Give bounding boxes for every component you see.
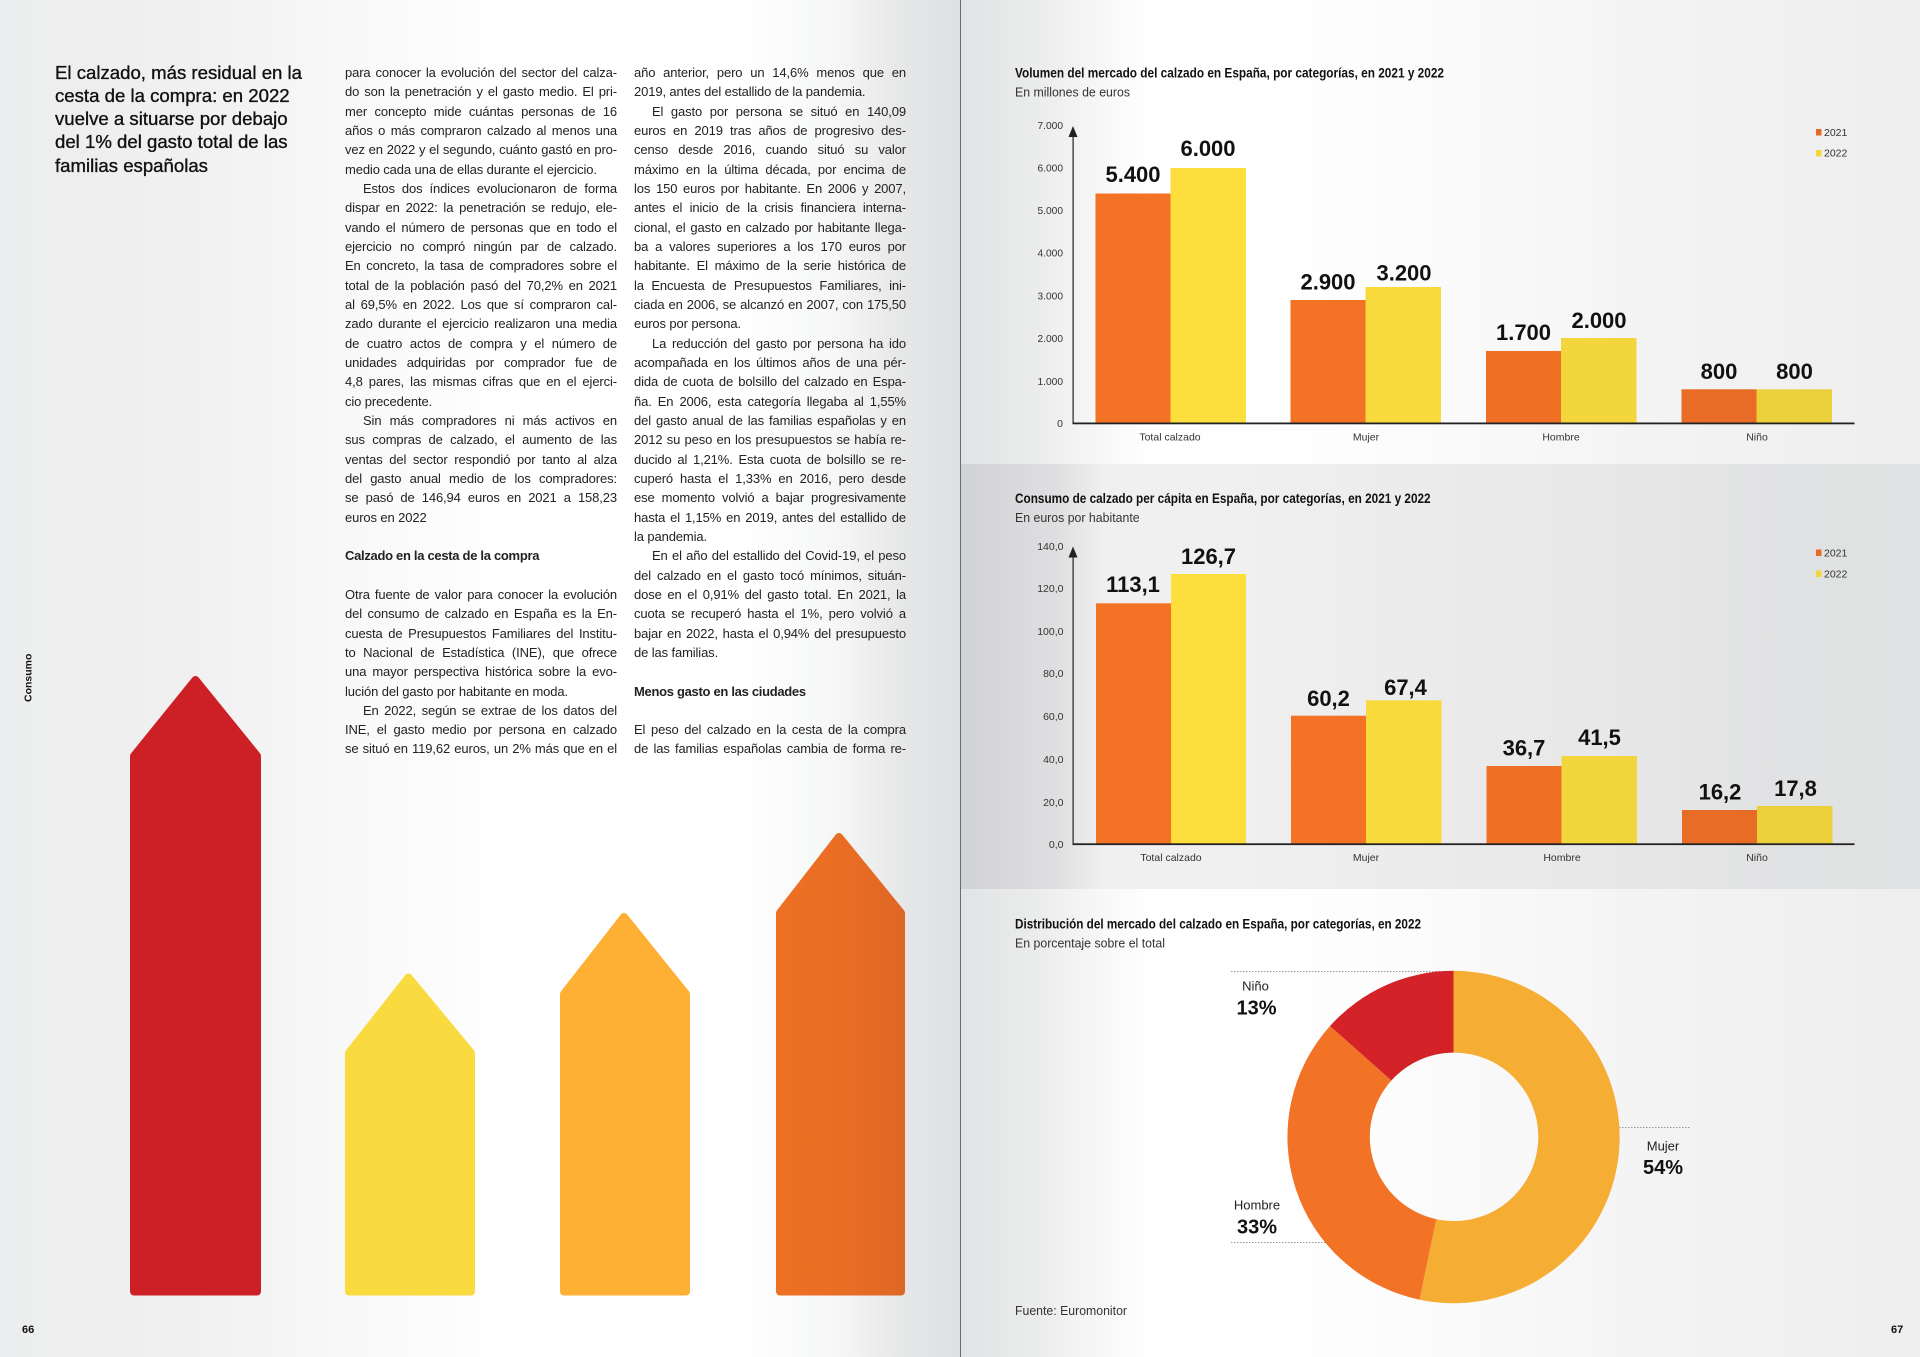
chart 2 value labels: 16,2: [1699, 780, 1741, 805]
text block: second column: [634, 65, 906, 756]
text block: second column: acompañada en los últimos años de una pér-: [634, 355, 906, 370]
text block: second column: del gasto anual de las familias españolas y en: [634, 413, 906, 428]
chart 1 legend: 2021: [1824, 127, 1848, 139]
arrow: amber: [564, 917, 686, 1292]
arrow: dark orange: [780, 837, 901, 1292]
chart 2 y axis labels: 80,0: [1043, 668, 1064, 680]
text block: first column: cio precedente.: [345, 394, 432, 409]
heading: left page title: El calzado, más residual en la: [55, 62, 302, 82]
chart 1 legend: 2022: [1824, 148, 1848, 160]
donut segment: Mujer: [1420, 971, 1620, 1303]
text block: first column: Estos dos índices evolucionaron de forma: [363, 181, 617, 196]
chart 2 y axis labels: 20,0: [1043, 797, 1064, 809]
text block: first column: En concreto, la tasa de compradores sobre el: [345, 258, 617, 273]
text block: second column: cional, el gasto en calzado por habitante llega-: [634, 220, 906, 235]
text block: first column: se pasó de 146,94 euros en 2021 a 158,23: [345, 490, 617, 505]
chart 1 axes: [1068, 126, 1854, 424]
chart 1 value labels: 800: [1776, 359, 1813, 384]
text block: first column: lución del gasto por habitante en moda.: [345, 684, 568, 698]
text block: second column: cuota se recuperó hasta el 1%, pero volvió a: [634, 606, 906, 621]
chart 2 legend: 2022: [1824, 568, 1848, 580]
donut segment: Hombre: [1287, 1026, 1436, 1300]
text block: second column: euros por persona.: [634, 316, 741, 331]
donut label: Niño: 13%: [1236, 998, 1277, 1020]
text block: second column: Menos gasto en las ciudades: [634, 684, 806, 698]
chart 1 subtitle: En millones de euros: [1015, 84, 1130, 100]
chart 3 title: Distribución del mercado del calzado en España, por categorías, en 2022: [1015, 916, 1421, 932]
chart 1 y axis labels: 3.000: [1038, 290, 1063, 302]
heading: left page title: vuelve a situarse por debajo: [55, 108, 288, 129]
text block: first column: ejercicio no compró ningún par de calzado.: [345, 239, 617, 254]
text block: second column: los 150 euros por habitante. En 2006 y 2007,: [634, 181, 906, 196]
text block: first column: Calzado en la cesta de la compra: [345, 548, 539, 563]
text block: second column: dida de cuota de bolsillo del calzado en Espa-: [634, 374, 906, 389]
chart 2 legend: [1816, 548, 1848, 580]
chart 1 bars: [1096, 168, 1832, 423]
chart 1 category labels: Total calzado: [1139, 432, 1201, 444]
text block: first column: al 69,5% en 2022. Los que sí compraron cal-: [345, 297, 617, 312]
text block: second column: ciada en 2006, se alcanzó en 2007, con 175,50: [634, 297, 906, 312]
chart 2 value labels: 113,1: [1106, 572, 1160, 597]
chart 1 category labels: Mujer: [1353, 432, 1380, 444]
section tag: Consumo: Consumo: [22, 654, 34, 702]
text block: second column: censo desde 2016, cuando situó su valor: [634, 142, 906, 157]
arrow: yellow: [349, 978, 471, 1292]
chart 2 value labels: 36,7: [1503, 736, 1545, 761]
text block: second column: El gasto por persona se situó en 140,09: [652, 104, 906, 119]
text block: second column: antes el inicio de la crisis financiera interna-: [634, 200, 906, 215]
chart 2 category labels: Niño: [1746, 852, 1768, 864]
chart 1 y axis labels: 5.000: [1038, 205, 1063, 217]
text block: first column: cuesta de Presupuestos Familiares del Institu-: [345, 626, 617, 641]
chart 2 value labels: 126,7: [1181, 544, 1236, 569]
left page background: [0, 0, 960, 1357]
chart 2: per capita consumption: [1015, 491, 1854, 864]
right page background: [961, 0, 1920, 1357]
chart 2 subtitle: En euros por habitante: [1015, 510, 1140, 525]
donut label: Hombre: Hombre: [1234, 1198, 1280, 1212]
chart 2 value labels: [1106, 544, 1817, 805]
chart 1 y axis labels: 4.000: [1038, 248, 1063, 260]
text block: first column: zado durante el ejercicio realizaron una media: [345, 316, 617, 331]
text block: second column: año anterior, pero un 14,6% menos que en: [634, 65, 906, 80]
chart 1 category labels: Hombre: [1542, 432, 1580, 444]
text block: first column: vando el número de personas que en todo el: [345, 220, 617, 235]
chart 2 category labels: Total calzado: [1140, 852, 1202, 864]
chart 1 category labels: Niño: [1746, 432, 1768, 444]
text block: first column: [345, 65, 618, 756]
chart 2 category labels: [1140, 852, 1768, 864]
chart 1 value labels: 800: [1701, 359, 1737, 384]
donut segment: Niño: [1330, 971, 1454, 1080]
arrow: red: [134, 680, 257, 1292]
chart 1 value labels: [1105, 136, 1813, 384]
text block: second column: del calzado en el gasto tocó mínimos, situán-: [634, 568, 906, 583]
heading: left page title: del 1% del gasto total de las: [55, 131, 288, 152]
text block: first column: del consumo de calzado en España es la En-: [345, 606, 617, 621]
chart 2 y axis labels: 100,0: [1037, 626, 1064, 638]
chart 1 y axis labels: 6.000: [1038, 162, 1063, 174]
text block: second column: de las familias.: [634, 645, 718, 660]
text block: first column: dispar en 2022: la penetración se redujo, ele-: [345, 200, 617, 215]
chart 2 category labels: Hombre: [1543, 852, 1581, 864]
heading: left page title: cesta de la compra: en 2022: [55, 85, 290, 106]
text block: second column: euros en 2019 tras años de progresivo des-: [634, 123, 906, 138]
text block: second column: dose en el 0,91% del gasto total. En 2021, la: [634, 587, 906, 602]
text block: first column: mer concepto mide cuántas personas de 16: [345, 104, 617, 119]
text block: first column: total de la población pasó del 70,2% en 2021: [345, 278, 617, 293]
text block: second column: ducido al 1,21%. Esta cuota de bolsillo se re-: [634, 452, 906, 467]
chart 1 legend: [1816, 127, 1848, 160]
text block: second column: El peso del calzado en la cesta de la compra: [634, 722, 906, 737]
text block: first column: INE, el gasto medio por persona en calzado: [345, 722, 617, 737]
text block: second column: la Encuesta de Presupuestos Familiares, ini-: [634, 278, 906, 293]
text block: second column: hasta el 1,15% en 2019, antes del estallido de: [634, 510, 906, 525]
text block: first column: to Nacional de Estadística (INE), que ofrece: [345, 645, 617, 660]
chart 1 y axis labels: 0: [1057, 418, 1063, 430]
text block: second column: máximo en la última década, por encima de: [634, 162, 906, 177]
text block: first column: se situó en 119,62 euros, un 2% más que en el: [345, 741, 617, 756]
heading: left page title: familias españolas: [55, 155, 208, 176]
page number 67: 67: [1891, 1324, 1903, 1336]
chart 1 value labels: 6.000: [1180, 136, 1236, 161]
chart 2 y axis labels: 0,0: [1049, 839, 1064, 851]
text block: first column: medio cada una de ellas durante el ejercicio.: [345, 162, 597, 177]
text block: first column: vez en 2022 y el segundo, cuánto gastó en pro-: [345, 142, 617, 157]
chart 1 title: Volumen del mercado del calzado en España, por categorías, en 2021 y 2022: [1015, 66, 1444, 80]
chart 2 value labels: 17,8: [1774, 776, 1817, 801]
chart 2 y axis labels: 40,0: [1043, 754, 1064, 766]
chart 3 subtitle: En porcentaje sobre el total: [1015, 936, 1165, 950]
chart 2 legend: 2021: [1824, 548, 1848, 560]
chart 2 category labels: Mujer: [1353, 852, 1380, 864]
chart 2 value labels: 67,4: [1384, 675, 1428, 700]
text block: second column: de las familias españolas cambia de forma re-: [634, 741, 906, 756]
chart 2 y axis labels: 140,0: [1037, 541, 1064, 553]
text block: first column: Otra fuente de valor para conocer la evolución: [345, 587, 617, 602]
donut label: Niño: [1236, 978, 1277, 1020]
donut label: Hombre: 33%: [1237, 1217, 1277, 1239]
source note: Fuente: Euromonitor: [1015, 1303, 1128, 1318]
donut label: Mujer: 54%: [1643, 1157, 1683, 1179]
chart 1 value labels: 2.900: [1300, 270, 1356, 295]
chart 1: market volume: [1015, 66, 1854, 444]
text block: first column: del gasto anual medio de los compradores:: [345, 471, 617, 486]
text block: first column: para conocer la evolución del sector del calza-: [345, 65, 617, 80]
donut label: Mujer: Mujer: [1647, 1138, 1680, 1154]
text block: second column: habitante. El máximo de la serie histórica de: [634, 258, 906, 273]
text block: second column: ña. En 2006, esta categoría llegaba al 1,55%: [634, 394, 906, 409]
chart 3: market distribution donut: [1015, 916, 1690, 1318]
chart 1 value labels: 2.000: [1571, 308, 1627, 333]
chart 2 y axis labels: 120,0: [1037, 583, 1064, 595]
text block: second column: cuperó hasta el 1,33% en 2016, pero desde: [634, 471, 906, 486]
text block: second column: 2019, antes del estallido de la pandemia.: [634, 84, 865, 99]
donut label: Niño: Niño: [1242, 978, 1269, 994]
page spine: [960, 0, 961, 1357]
chart 2 value labels: 41,5: [1578, 725, 1621, 750]
panel: grey band behind per-capita chart: [961, 464, 1920, 889]
chart 1 category labels: [1139, 432, 1768, 444]
text block: second column: 2012 su peso en los presupuestos se había re-: [634, 432, 906, 447]
text block: first column: una mayor perspectiva histórica sobre la evo-: [345, 664, 617, 679]
chart 1 y axis labels: 7.000: [1038, 120, 1063, 132]
text block: second column: La reducción del gasto por persona ha ido: [652, 336, 906, 351]
chart 2 y axis labels: 60,0: [1043, 711, 1064, 723]
text block: first column: 4,8 pares, las mismas cifras que en el ejerci-: [345, 374, 617, 389]
text block: second column: En el año del estallido del Covid-19, el peso: [652, 548, 906, 563]
chart 2 title: Consumo de calzado per cápita en España, por categorías, en 2021 y 2022: [1015, 491, 1431, 506]
text block: first column: euros en 2022: [345, 510, 427, 525]
text block: first column: do son la penetración y el gasto medio. El pri-: [345, 84, 617, 99]
chart 2 y axis labels: [1037, 541, 1064, 851]
text block: first column: años o más compraron calzado al menos una: [345, 123, 617, 138]
chart 1 value labels: 3.200: [1376, 261, 1432, 286]
text block: first column: ventas del sector respondió por tanto al alza: [345, 452, 617, 467]
chart 1 value labels: 1.700: [1496, 320, 1551, 345]
text block: second column: bajar en 2022, hasta el 0,94% del presupuesto: [634, 626, 906, 641]
chart 2 axes: [1068, 546, 1854, 845]
text block: first column: de cuatro actos de compra y el número de: [345, 336, 617, 351]
text block: second column: ese momento volvió a bajar progresivamente: [634, 490, 906, 505]
page number 66: 66: [22, 1324, 34, 1336]
text block: first column: Sin más compradores ni más activos en: [363, 413, 617, 428]
chart 1 value labels: 5.400: [1105, 162, 1161, 187]
text block: first column: sus compras de calzado, el aumento de las: [345, 432, 617, 447]
donut label: Mujer: [1643, 1138, 1683, 1179]
text block: second column: la pandemia.: [634, 529, 707, 544]
decorative arrow columns: [130, 676, 905, 1296]
text block: first column: En 2022, según se extrae de los datos del: [363, 703, 617, 718]
chart 1 y axis labels: [1038, 120, 1063, 430]
chart 2 bars: [1096, 574, 1832, 844]
chart 1 y axis labels: 2.000: [1038, 333, 1063, 345]
donut label: Hombre: [1234, 1198, 1280, 1239]
text block: first column: unidades adquiridas por comprador fue de: [345, 355, 617, 370]
heading: left page title: [54, 62, 302, 176]
text block: second column: ba a valores superiores a los 170 euros por: [634, 239, 906, 254]
leader lines: [1231, 972, 1690, 1242]
chart 1 y axis labels: 1.000: [1038, 376, 1063, 388]
chart 2 value labels: 60,2: [1307, 686, 1350, 711]
